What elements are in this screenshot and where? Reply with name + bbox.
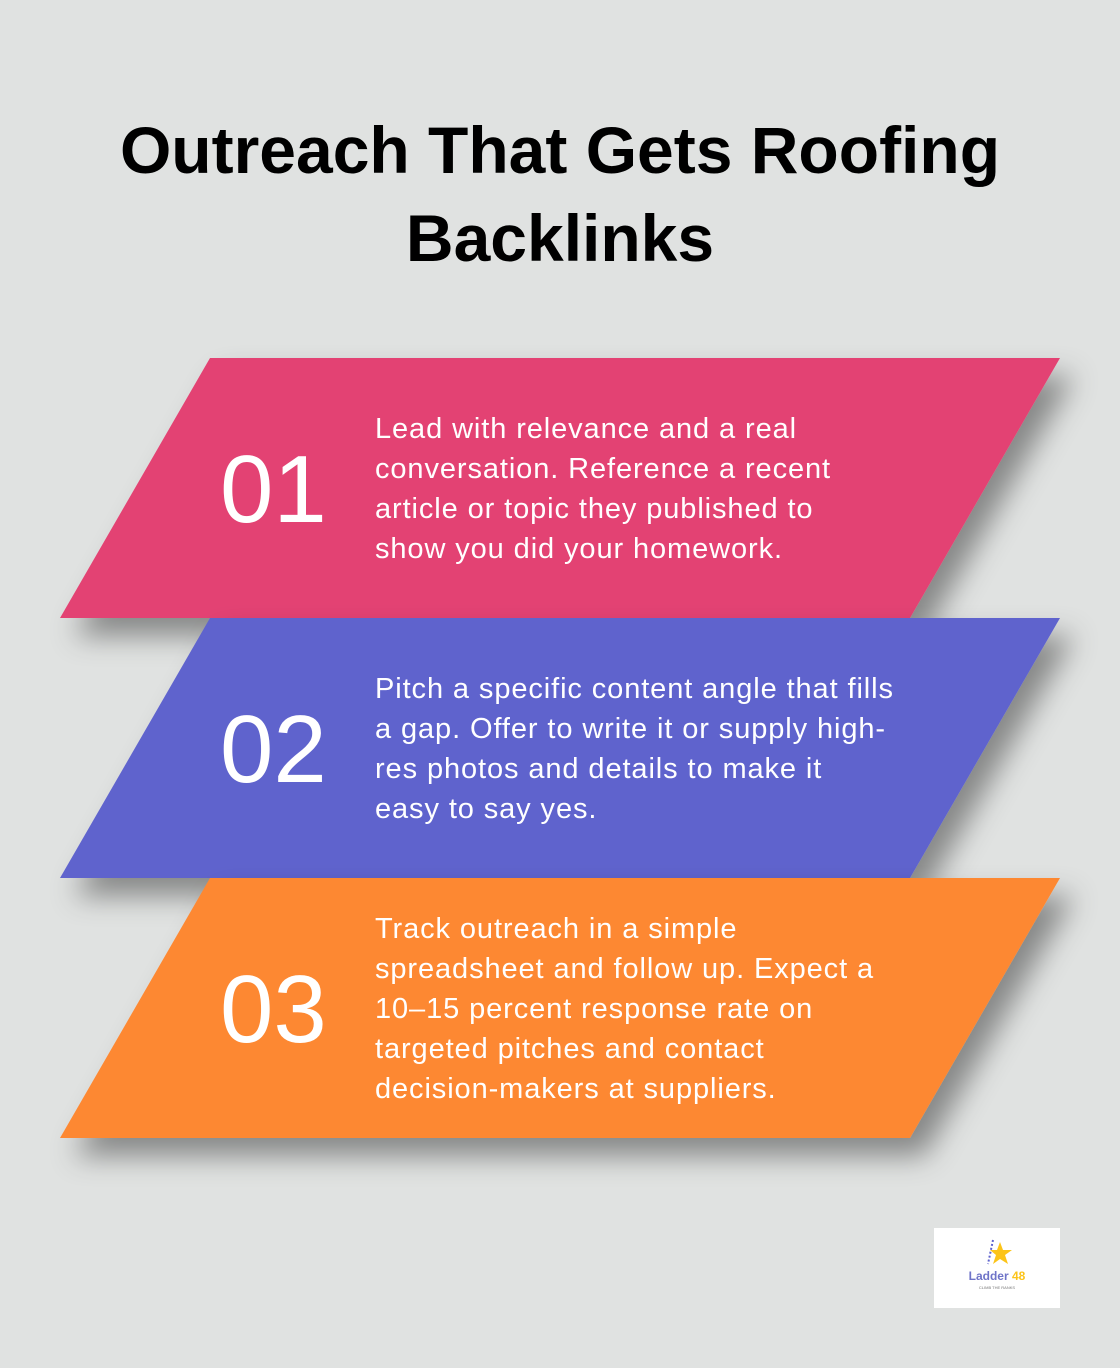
text 1	[375, 413, 831, 565]
text 2: Pitch a specific content angle that fills	[375, 673, 894, 705]
title: Outreach That Gets Roofing	[120, 113, 1000, 187]
text 3: spreadsheet and follow up. Expect a	[375, 953, 874, 985]
number 03: 03	[220, 956, 327, 1063]
text 1: conversation. Reference a recent	[375, 453, 831, 485]
text 3: Track outreach in a simple	[375, 913, 737, 945]
text 2: res photos and details to make it	[375, 753, 822, 785]
panel 2 shape	[60, 618, 1060, 878]
number 02: 02	[220, 696, 327, 803]
number 01: 01	[220, 436, 327, 543]
text 1: Lead with relevance and a real	[375, 413, 797, 445]
text 3: targeted pitches and contact	[375, 1033, 765, 1065]
panel 1 shape	[60, 358, 1060, 618]
logo	[934, 1228, 1060, 1308]
text 3: 10–15 percent response rate on	[375, 993, 813, 1025]
text 1: show you did your homework.	[375, 533, 783, 565]
text 3	[375, 913, 874, 1105]
title	[120, 113, 1000, 275]
text 2: easy to say yes.	[375, 793, 597, 825]
icon: star ladder	[987, 1240, 1012, 1264]
text 3: decision-makers at suppliers.	[375, 1073, 777, 1105]
text 1: article or topic they published to	[375, 493, 813, 525]
text 2: a gap. Offer to write it or supply high-	[375, 713, 886, 745]
panel 3 shape	[60, 878, 1060, 1138]
text 2	[375, 673, 894, 825]
title: Backlinks	[406, 201, 714, 275]
logo text: Ladder 48	[969, 1269, 1025, 1283]
logo: CLIMB THE RANKS	[979, 1285, 1015, 1290]
